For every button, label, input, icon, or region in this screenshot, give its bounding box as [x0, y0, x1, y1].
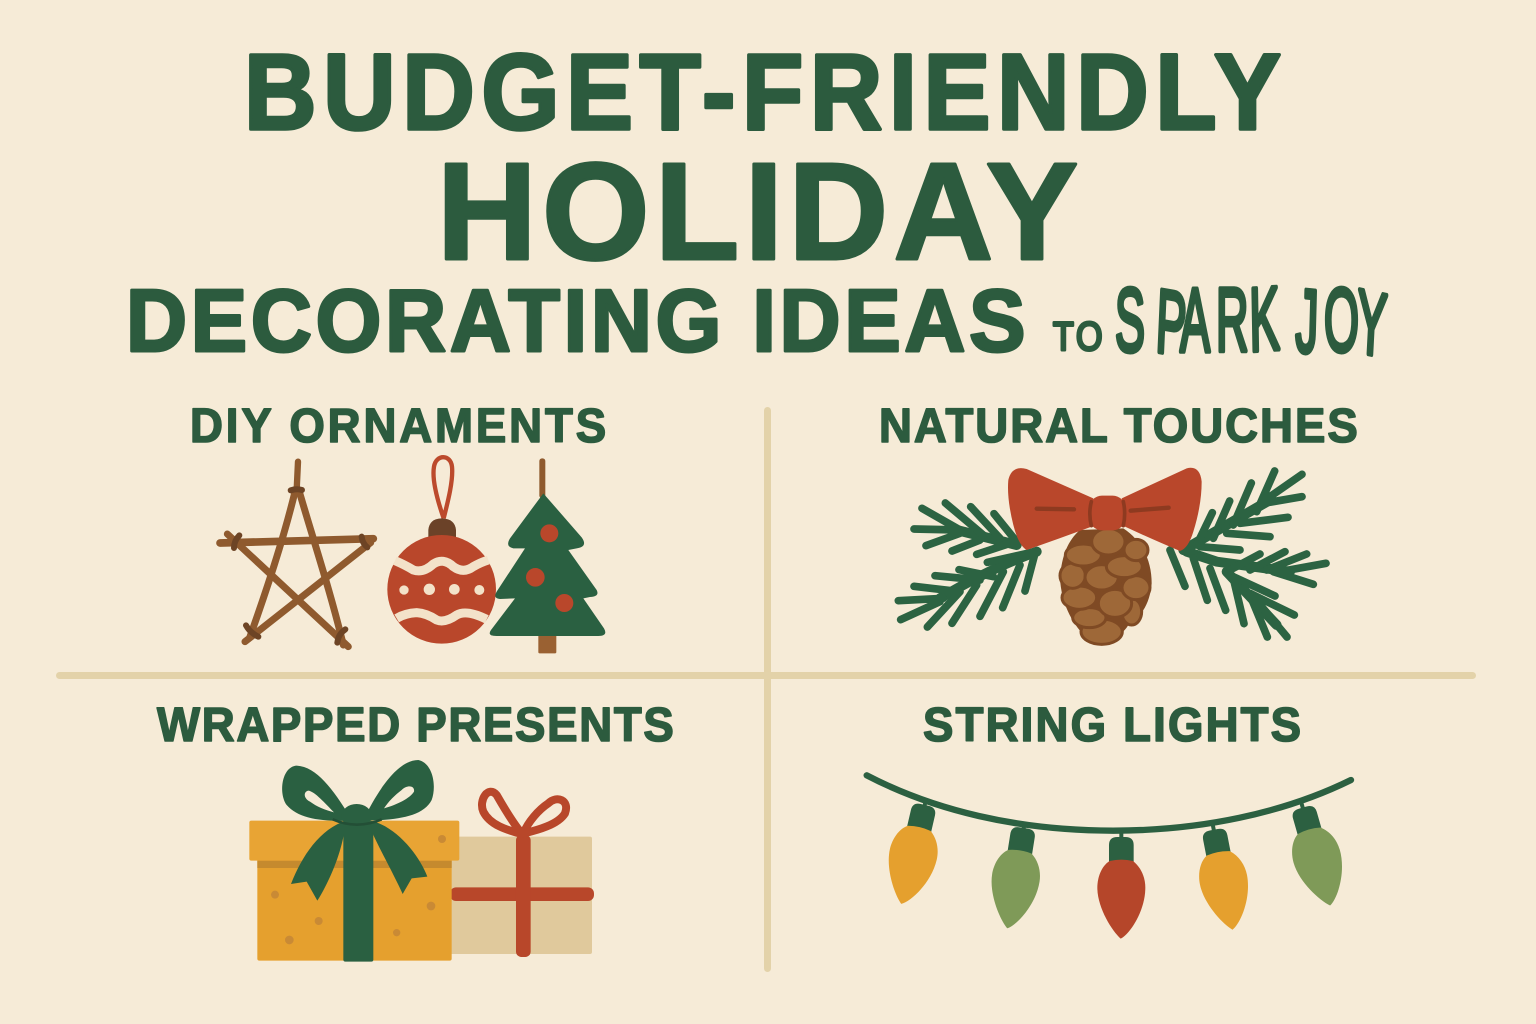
- heading: string lights: STRING LIGHTS: [923, 698, 1301, 751]
- icon: felt tree: [490, 458, 605, 653]
- icon: bulb 2: [984, 818, 1048, 932]
- icon: orange gift: [249, 760, 459, 962]
- title line 2: HOLIDAY: [437, 135, 1078, 289]
- panel: string lights: [867, 698, 1354, 939]
- icon: ornaments: [220, 457, 605, 653]
- divider: vertical: [764, 407, 771, 972]
- heading: DIY ornaments: DIY ORNAMENTS: [190, 399, 606, 452]
- heading: natural touches: NATURAL TOUCHES: [879, 399, 1358, 452]
- icon: gift boxes: [249, 760, 594, 962]
- title line 1: BUDGET-FRIENDLY: [244, 33, 1281, 153]
- icon: red bow: [1008, 468, 1202, 551]
- icon: bulb 4: [1189, 819, 1257, 934]
- handwritten tagline: TO: [1053, 313, 1102, 359]
- icon: wire: [867, 775, 1351, 831]
- divider: horizontal: [56, 672, 1476, 679]
- icon: red bauble: [387, 457, 496, 644]
- icon: string of lights: [867, 775, 1354, 939]
- panel: natural touches: [879, 399, 1358, 645]
- heading: wrapped presents: WRAPPED PRESENTS: [157, 698, 674, 751]
- icon: bow, pine cone and branches: [898, 468, 1326, 645]
- icon: tan gift: [447, 792, 594, 957]
- icon: bulb 1: [878, 794, 949, 909]
- panel: wrapped presents: [157, 698, 674, 962]
- title line 3: DECORATING IDEAS: [126, 272, 1026, 370]
- icon: bulb 5: [1278, 795, 1354, 912]
- icon: pine cone: [1060, 528, 1152, 645]
- panel: DIY ornaments: [190, 399, 606, 653]
- icon: pine branches: [898, 471, 1326, 637]
- icon: bulb 3: [1097, 831, 1145, 939]
- title: [126, 33, 1389, 377]
- icon: twig star: [220, 462, 373, 647]
- handwritten tagline: SPARK JOY: [1115, 269, 1389, 377]
